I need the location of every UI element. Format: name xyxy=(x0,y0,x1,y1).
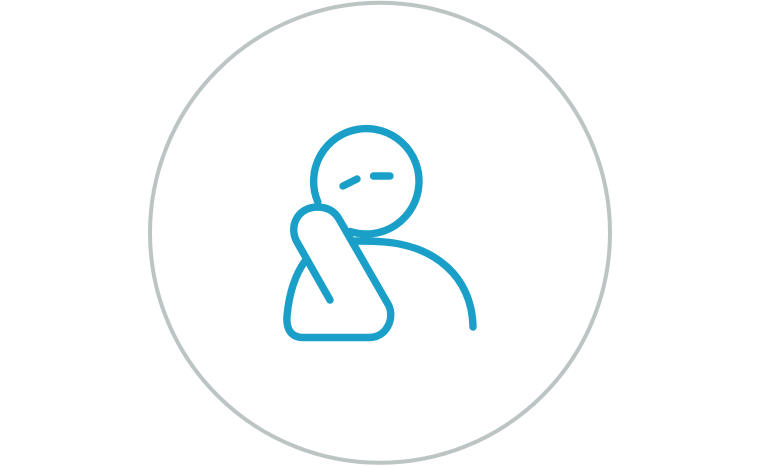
outer circle xyxy=(150,3,610,463)
eye: right xyxy=(374,172,390,180)
shoulder and back xyxy=(355,241,473,327)
eye: left xyxy=(343,179,357,186)
icon: person xyxy=(287,129,473,338)
raised arm xyxy=(287,207,391,338)
head xyxy=(314,129,419,234)
